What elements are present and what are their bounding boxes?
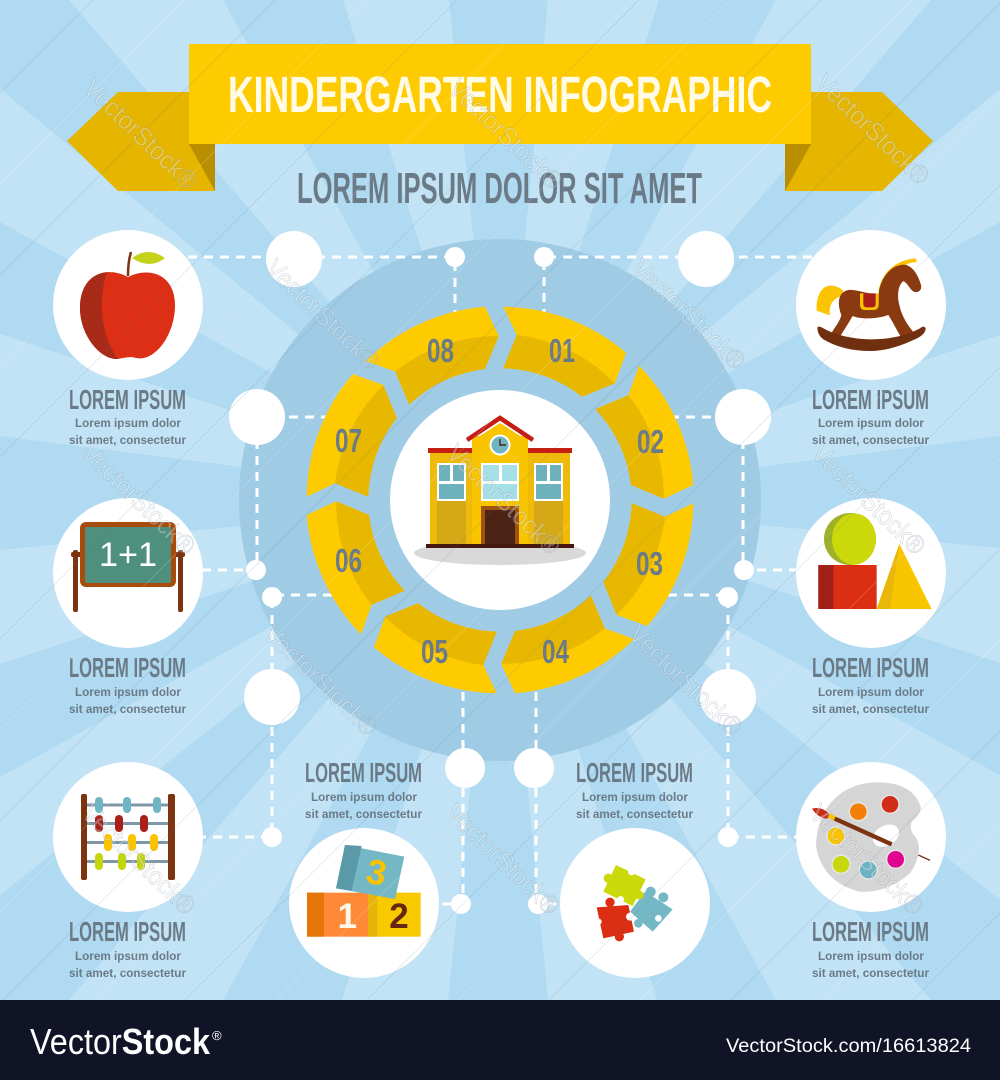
watermark text: VectorStock® xyxy=(810,68,936,191)
icon: geometric blocks xyxy=(818,513,932,609)
segment 07: 07 xyxy=(335,422,362,459)
item: apple, top left xyxy=(53,230,203,447)
subtitle: LOREM IPSUM DOLOR SIT AMET xyxy=(297,164,702,213)
watermark text: VectorStock® xyxy=(441,438,567,561)
item: apple, top left: LOREM IPSUM xyxy=(69,384,186,415)
icon: apple xyxy=(80,252,175,359)
item: paint palette, bottom right xyxy=(796,762,946,980)
segment 05 xyxy=(374,603,497,693)
icon: blackboard xyxy=(71,522,185,612)
item: blackboard, middle left: Lorem ipsum dolor xyxy=(75,685,181,699)
item: paint palette, bottom right: Lorem ipsum dolor xyxy=(818,949,924,963)
icon: number blocks: 1 xyxy=(338,897,357,936)
item: puzzle pieces, bottom center right: sit amet, consectetur xyxy=(576,807,693,821)
watermark text: VectorStock® xyxy=(258,619,384,742)
segment 01 xyxy=(503,307,626,397)
segment 08 xyxy=(366,274,516,425)
item: blackboard, middle left: LOREM IPSUM xyxy=(69,652,186,683)
segment 01: 01 xyxy=(549,332,575,369)
watermark text: VectorStock® xyxy=(626,253,752,376)
item: rocking horse, top right: sit amet, consectetur xyxy=(812,433,929,447)
segment 03: 03 xyxy=(636,545,663,582)
watermark text: VectorStock® xyxy=(260,253,386,376)
footer bar xyxy=(0,1000,1000,1080)
footer registered mark: ® xyxy=(212,1028,222,1043)
segment 06 xyxy=(274,484,425,634)
item: abacus, bottom left: sit amet, consectetur xyxy=(69,966,186,980)
item: puzzle pieces, bottom center right: LOREM IPSUM xyxy=(576,757,693,788)
item: toy blocks, middle right xyxy=(796,498,946,716)
watermark text: VectorStock® xyxy=(78,73,204,196)
item: numbered blocks, bottom center left: Lorem ipsum dolor xyxy=(311,790,417,804)
segment 07 xyxy=(307,374,397,497)
watermark text: VectorStock® xyxy=(76,438,202,561)
segment 06: 06 xyxy=(335,542,362,579)
watermark text: VectorStock® xyxy=(623,619,749,742)
item: toy blocks, middle right: sit amet, consectetur xyxy=(812,702,929,716)
banner main with title: KINDERGARTEN INFOGRAPHIC xyxy=(228,66,772,123)
segment 02 xyxy=(575,366,726,516)
watermark text: VectorStock® xyxy=(804,798,930,921)
icon: blackboard: 1+1 xyxy=(99,536,157,574)
segment 02: 02 xyxy=(637,423,664,460)
icon: number blocks: 3 xyxy=(363,852,390,894)
central blue disc xyxy=(239,239,761,761)
banner main with title xyxy=(189,44,811,144)
item: abacus, bottom left: Lorem ipsum dolor xyxy=(75,949,181,963)
item: puzzle pieces, bottom center right: Lorem ipsum dolor xyxy=(582,790,688,804)
watermark text: VectorStock® xyxy=(440,798,566,921)
footer image id: VectorStock.com/16613824 xyxy=(726,1036,971,1057)
item: numbered blocks, bottom center left: LOREM IPSUM xyxy=(305,757,422,788)
item: rocking horse, top right xyxy=(796,230,946,447)
footer logo: VectorStock xyxy=(30,1021,211,1062)
icon: paint palette xyxy=(812,782,930,892)
item: apple, top left: sit amet, consectetur xyxy=(69,433,186,447)
segment 08: 08 xyxy=(427,332,454,369)
icon: number blocks xyxy=(307,845,421,937)
item: abacus, bottom left xyxy=(53,762,203,980)
icon: number blocks: 2 xyxy=(389,897,409,936)
watermark text xyxy=(76,68,936,921)
item: toy blocks, middle right: Lorem ipsum dolor xyxy=(818,685,924,699)
dashed connectors and nodes xyxy=(188,231,812,914)
icon: rocking horse xyxy=(817,258,926,351)
item: abacus, bottom left: LOREM IPSUM xyxy=(69,916,186,947)
watermark text: VectorStock® xyxy=(76,798,202,921)
segment 03 xyxy=(603,503,693,626)
item: rocking horse, top right: Lorem ipsum dolor xyxy=(818,416,924,430)
center circle with school building icon xyxy=(390,390,610,610)
watermark text: VectorStock® xyxy=(806,438,932,561)
item: puzzle pieces, bottom center right xyxy=(560,757,710,978)
banner ribbon right fold xyxy=(785,92,933,191)
segment 04: 04 xyxy=(542,633,569,670)
segment 04 xyxy=(484,575,634,726)
icon: puzzle pieces xyxy=(596,865,673,941)
item: blackboard, middle left: sit amet, consectetur xyxy=(69,702,186,716)
item: apple, top left: Lorem ipsum dolor xyxy=(75,416,181,430)
watermark text: VectorStock® xyxy=(443,73,569,196)
icon: abacus xyxy=(81,794,175,880)
item: numbered blocks, bottom center left xyxy=(289,757,439,978)
item: blackboard, middle left xyxy=(53,498,203,716)
segment 05: 05 xyxy=(421,633,448,670)
item: numbered blocks, bottom center left: sit amet, consectetur xyxy=(305,807,422,821)
item: paint palette, bottom right: sit amet, consectetur xyxy=(812,966,929,980)
banner ribbon left fold xyxy=(67,92,215,191)
